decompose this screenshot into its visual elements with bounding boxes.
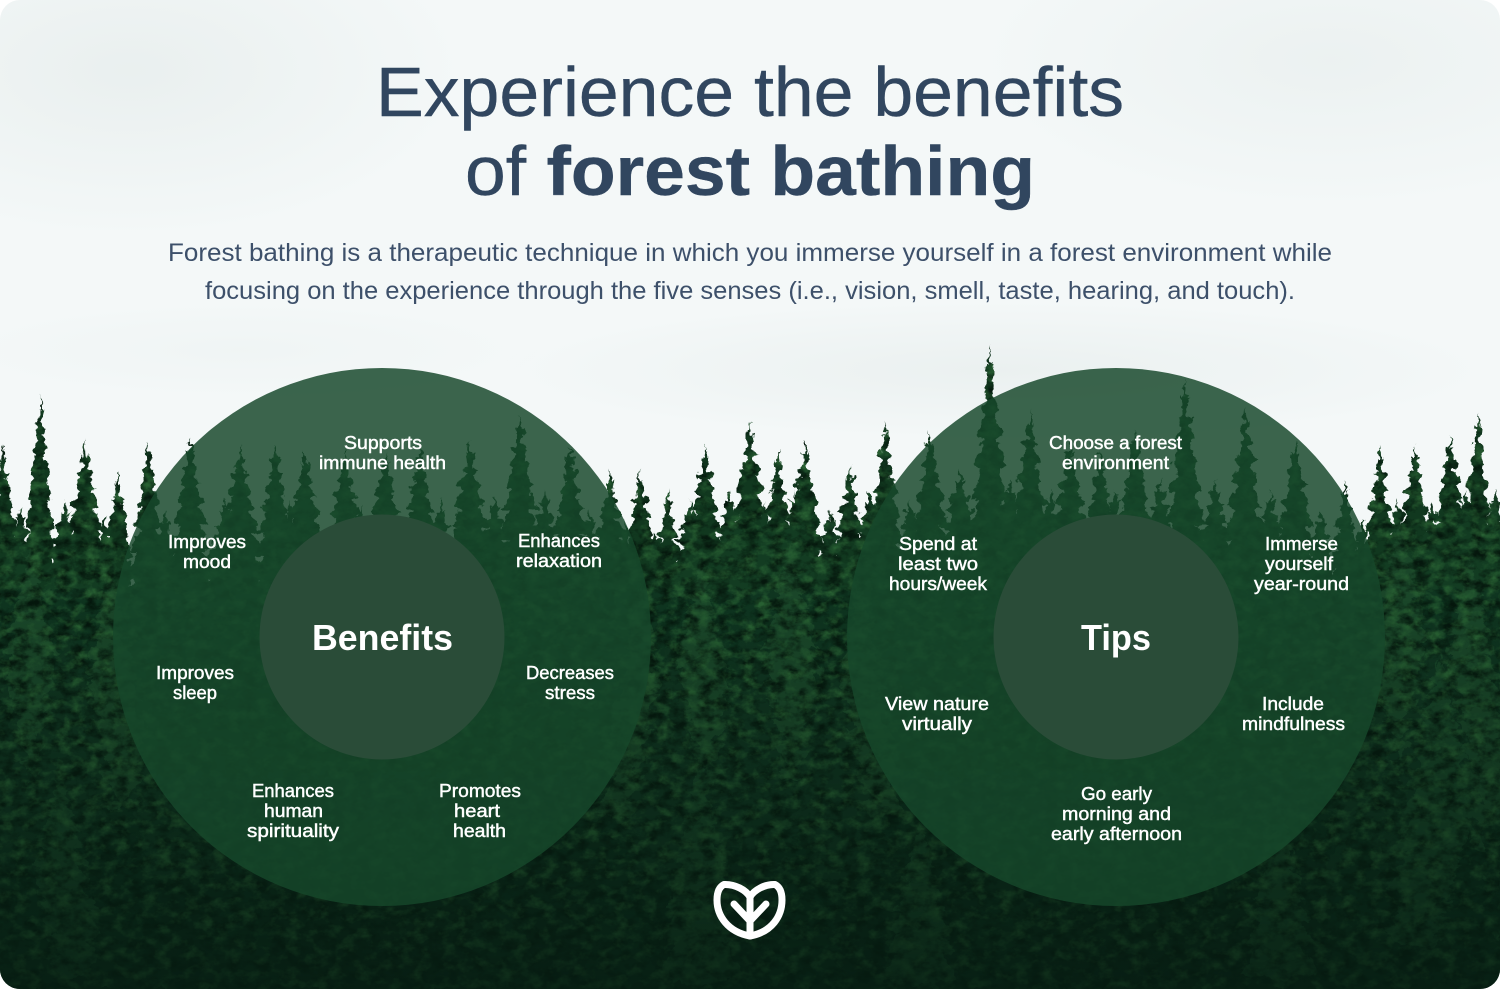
inner hub: benefits bbox=[260, 514, 504, 760]
tip: choose a forest environment bbox=[1049, 433, 1182, 473]
tip: immerse yourself year-round: yourself bbox=[1265, 554, 1334, 574]
tip: spend at least two hours/week bbox=[889, 534, 988, 594]
tip: include mindfulness: mindfulness bbox=[1242, 714, 1345, 734]
heading: Benefits: Benefits bbox=[312, 617, 453, 658]
tip: include mindfulness bbox=[1242, 694, 1345, 734]
tip: immerse yourself year-round bbox=[1254, 534, 1349, 594]
benefit: enhances human spirituality: spirituality bbox=[247, 821, 339, 841]
benefit: decreases stress: stress bbox=[545, 683, 595, 703]
tip: go early morning and early afternoon: early afternoon bbox=[1051, 824, 1182, 844]
tip: go early morning and early afternoon: Go early bbox=[1081, 784, 1152, 804]
outer ring: benefits bbox=[113, 368, 651, 906]
benefit: decreases stress: Decreases bbox=[526, 663, 614, 683]
title: Experience the benefits bbox=[376, 53, 1124, 131]
benefit: promotes heart health: Promotes bbox=[439, 781, 521, 801]
benefit: enhances relaxation: relaxation bbox=[516, 551, 602, 571]
benefit: improves mood: Improves bbox=[168, 532, 246, 552]
title bbox=[376, 53, 1124, 210]
benefit: supports immune health: immune health bbox=[319, 453, 446, 473]
benefit: enhances relaxation bbox=[516, 531, 602, 571]
tip: go early morning and early afternoon: morning and bbox=[1062, 804, 1171, 824]
intro paragraph: Forest bathing is a therapeutic technique in which you immerse yourself in a forest environment while bbox=[168, 239, 1332, 267]
benefit: enhances human spirituality: Enhances bbox=[252, 781, 334, 801]
tip: view nature virtually bbox=[885, 694, 989, 734]
benefit: improves mood bbox=[168, 532, 246, 572]
tip: choose a forest environment: environment bbox=[1062, 453, 1169, 473]
intro paragraph bbox=[168, 239, 1332, 305]
tip: view nature virtually: virtually bbox=[902, 714, 972, 734]
panel: benefits circle bbox=[113, 368, 651, 906]
benefit: improves sleep: sleep bbox=[173, 683, 217, 703]
heading: Tips: Tips bbox=[1081, 617, 1151, 658]
benefit: enhances human spirituality: human bbox=[264, 801, 323, 821]
inner hub: tips bbox=[994, 514, 1238, 760]
tip: go early morning and early afternoon bbox=[1051, 784, 1182, 844]
benefit: improves mood: mood bbox=[183, 552, 231, 572]
benefit: supports immune health: Supports bbox=[344, 433, 422, 453]
benefit: improves sleep: Improves bbox=[156, 663, 234, 683]
benefit: enhances relaxation: Enhances bbox=[518, 531, 600, 551]
panel: tips circle bbox=[847, 368, 1385, 906]
intro paragraph: focusing on the experience through the five senses (i.e., vision, smell, taste, hearing, and touch). bbox=[205, 277, 1295, 305]
outer ring: tips bbox=[847, 368, 1385, 906]
benefit: promotes heart health bbox=[439, 781, 521, 841]
tip: immerse yourself year-round: Immerse bbox=[1265, 534, 1338, 554]
icon: leaf heart logo bbox=[717, 884, 782, 936]
benefit: promotes heart health: health bbox=[453, 821, 506, 841]
benefit: decreases stress bbox=[526, 663, 614, 703]
benefit: improves sleep bbox=[156, 663, 234, 703]
benefit: enhances human spirituality bbox=[247, 781, 339, 841]
tip: immerse yourself year-round: year-round bbox=[1254, 574, 1349, 594]
tip: include mindfulness: Include bbox=[1262, 694, 1324, 714]
tip: spend at least two hours/week: least two bbox=[898, 554, 978, 574]
tip: spend at least two hours/week: hours/week bbox=[889, 574, 988, 594]
tip: spend at least two hours/week: Spend at bbox=[899, 534, 977, 554]
benefit: supports immune health bbox=[319, 433, 446, 473]
title: of forest bathing bbox=[465, 132, 1035, 210]
benefit: promotes heart health: heart bbox=[454, 801, 500, 821]
tip: choose a forest environment: Choose a forest bbox=[1049, 433, 1182, 453]
tip: view nature virtually: View nature bbox=[885, 694, 989, 714]
